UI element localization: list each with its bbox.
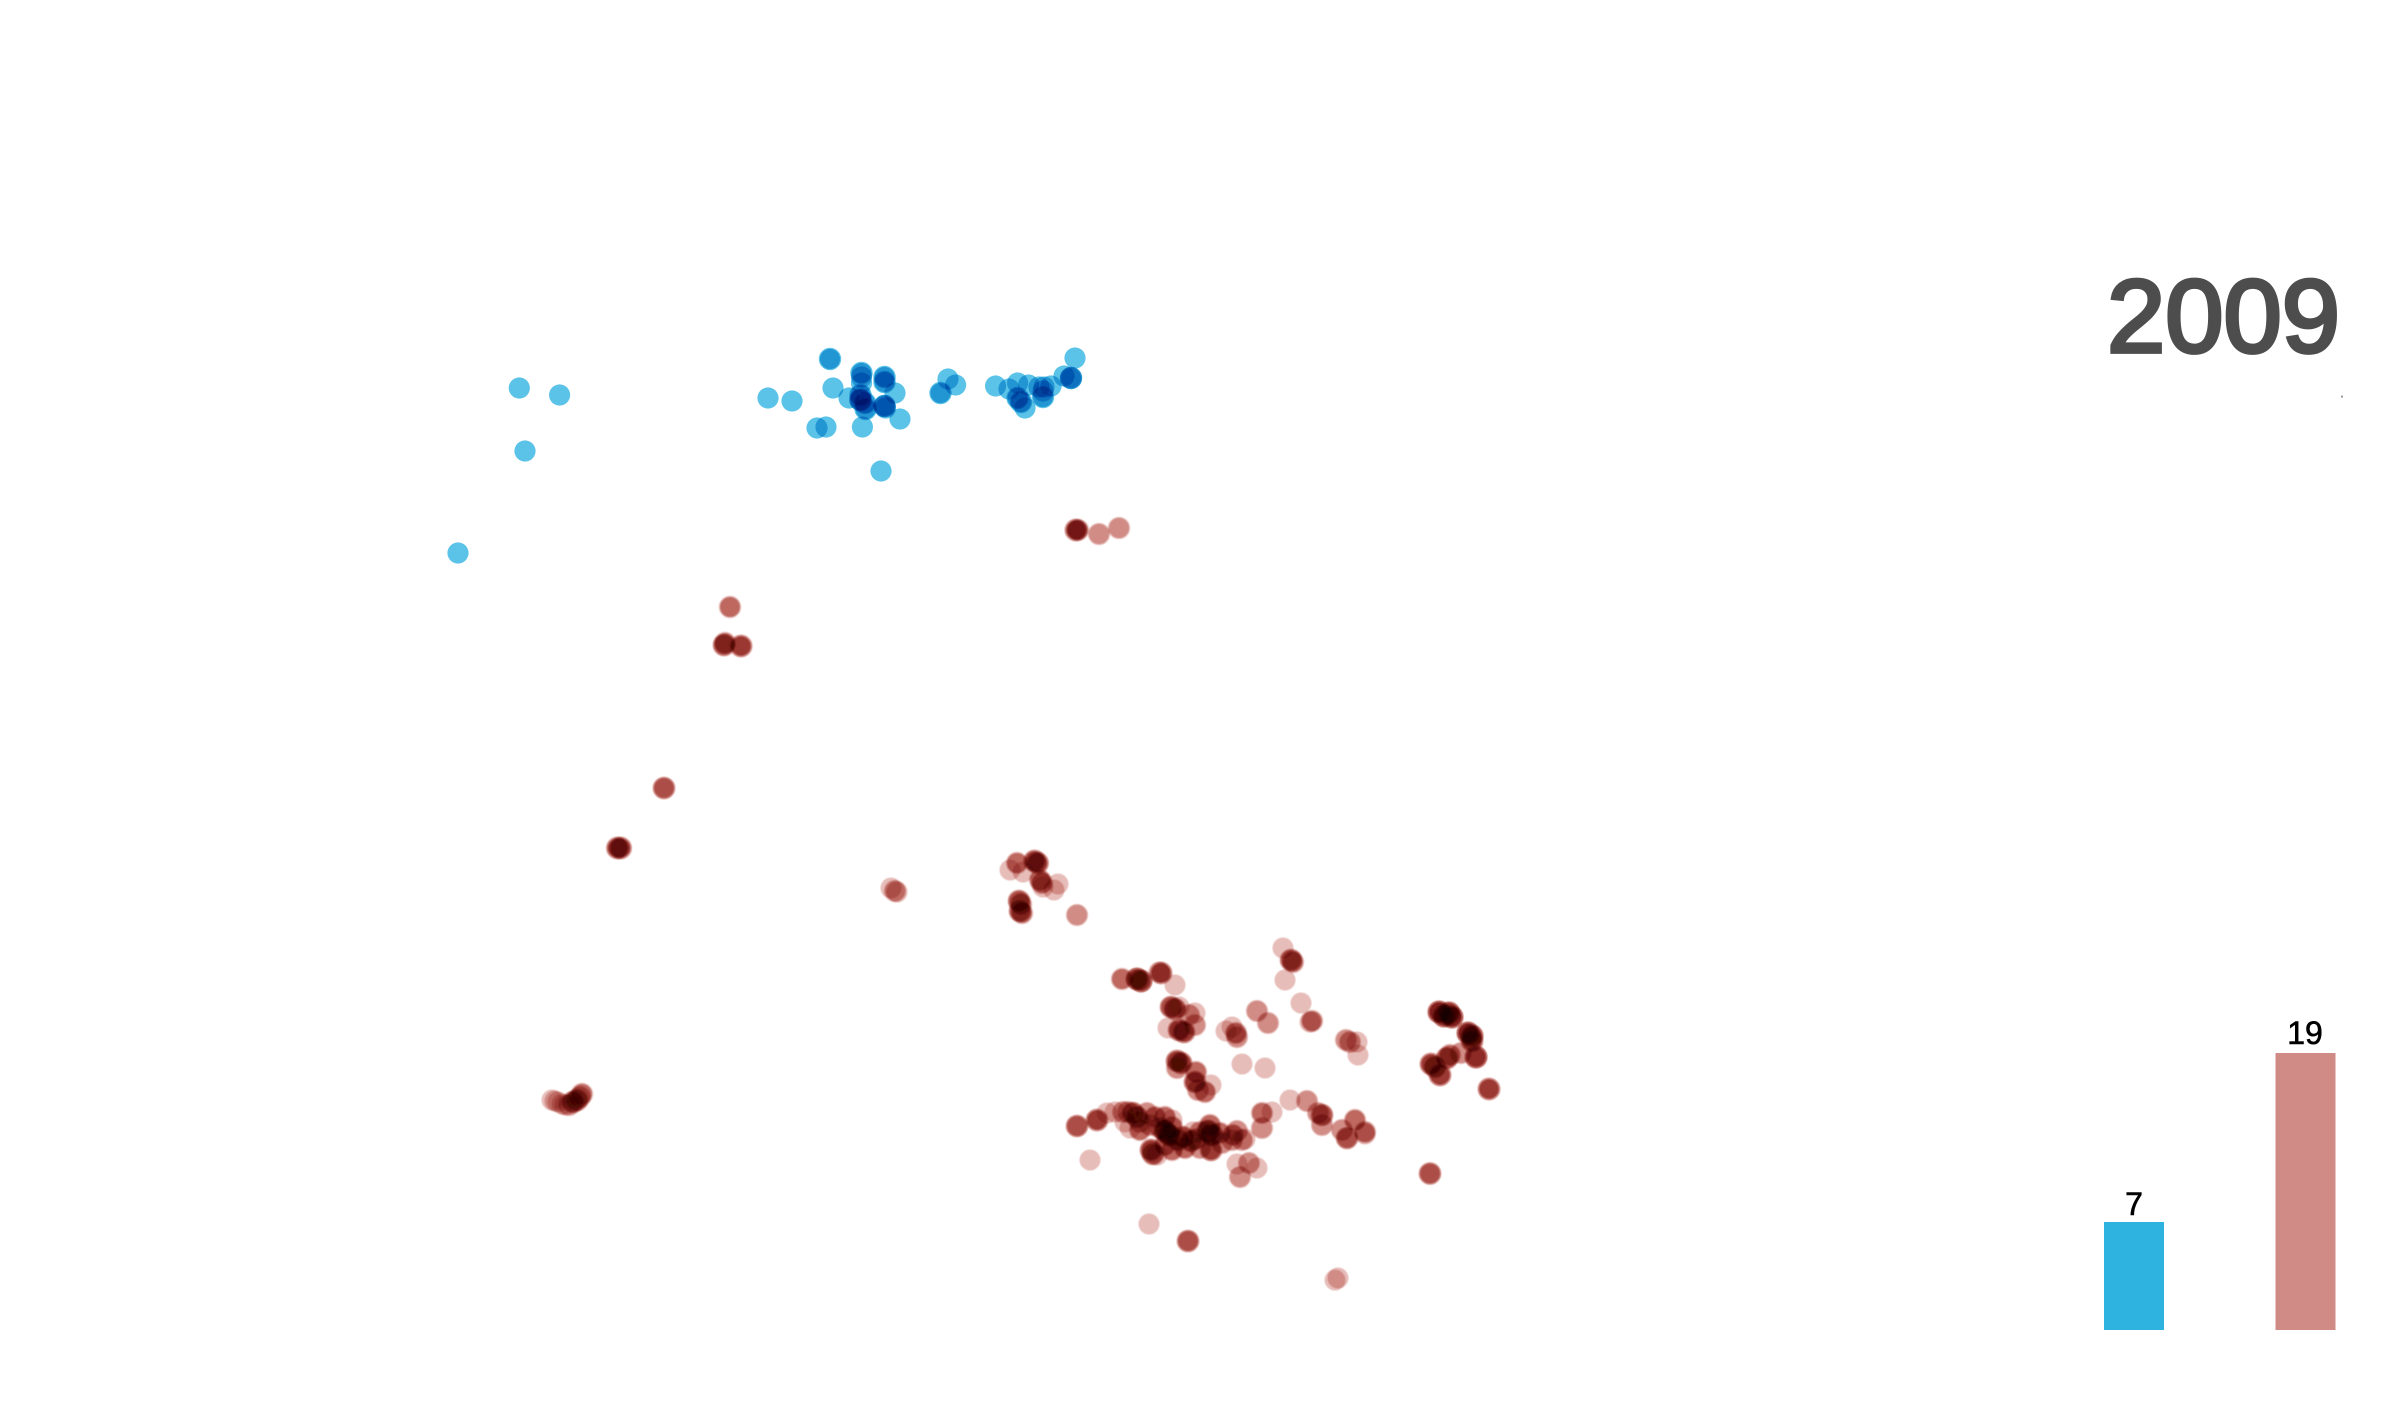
red bar value: 19 — [2287, 1015, 2323, 1051]
blue bar value: 7 — [2125, 1186, 2143, 1222]
southern red band — [1066, 1090, 1441, 1290]
eastern red scatter — [1216, 938, 1368, 1078]
central red cluster — [1000, 850, 1088, 926]
bar chart — [2104, 1015, 2336, 1330]
red bar — [2276, 1053, 2336, 1330]
southwest red cluster — [542, 1083, 593, 1116]
year title: 2009 — [2107, 259, 2340, 375]
tick mark — [2342, 396, 2343, 398]
mid red cluster — [1111, 962, 1222, 1103]
red dots map — [542, 517, 1500, 1290]
far east red cluster — [1420, 1001, 1500, 1100]
blue bar — [2104, 1222, 2164, 1330]
north red cluster — [607, 517, 1130, 902]
blue dots map — [447, 347, 1086, 564]
